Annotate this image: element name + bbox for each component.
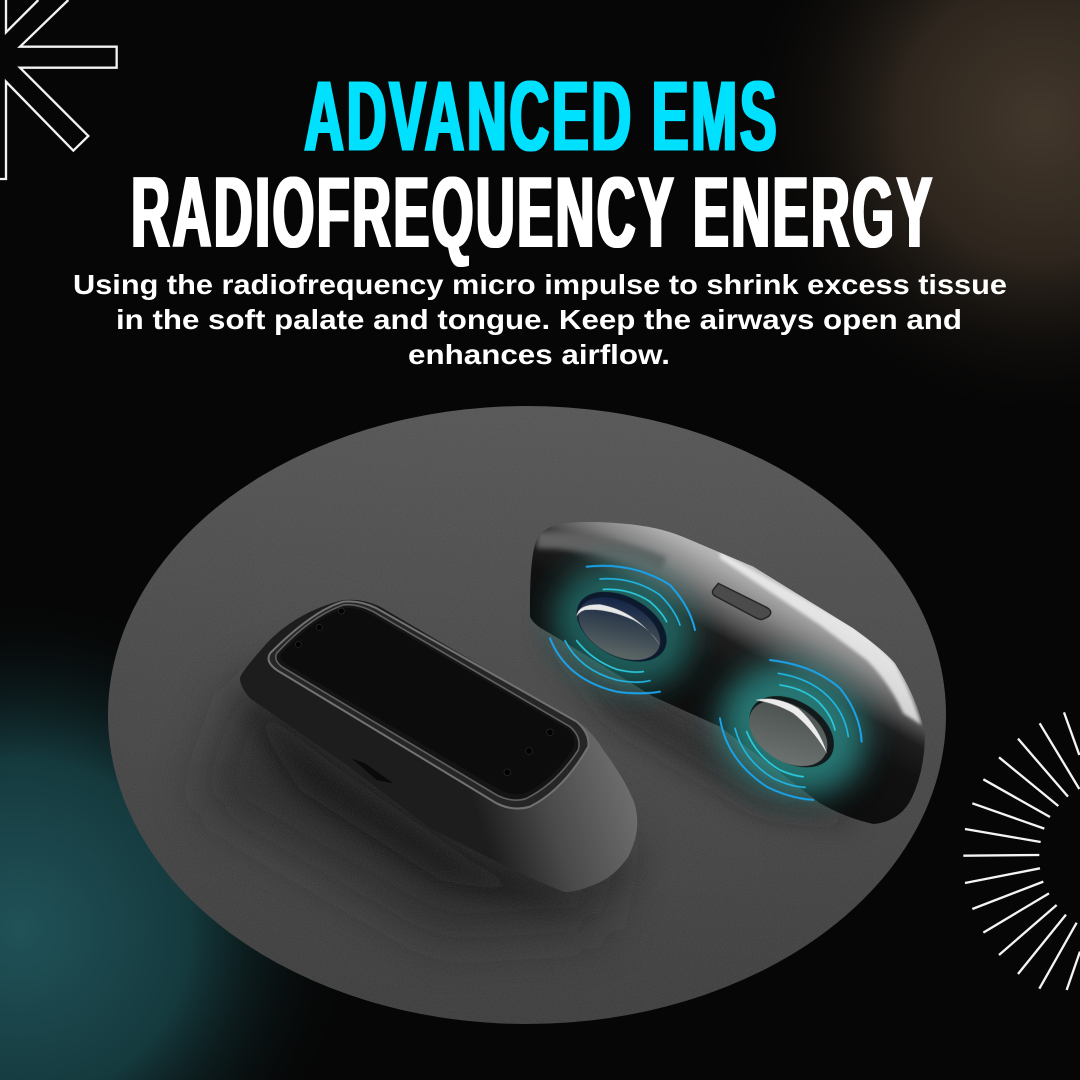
- teal glow: [534, 544, 888, 819]
- bright top rim: [720, 552, 922, 725]
- electrode right: [736, 681, 847, 782]
- signal arcs left: [550, 566, 695, 693]
- device top panel: [281, 608, 574, 794]
- upper left highlight: [537, 540, 663, 565]
- charging port: [352, 758, 393, 783]
- device: closed mouthpiece left: [240, 600, 637, 892]
- sensor dots: [295, 608, 553, 776]
- icon: sunburst lines right: [963, 712, 1080, 990]
- device shadows: [109, 442, 945, 1022]
- description text: in the soft palate and tongue. Keep the airways open and: [116, 304, 962, 335]
- device top outer ring: [268, 601, 588, 809]
- description text: Using the radiofrequency micro impulse to shrink excess tissue: [73, 269, 1007, 300]
- electrode left: [565, 577, 678, 676]
- description text: enhances airflow.: [408, 339, 670, 370]
- icon: outlined asterisk top left: [0, 0, 117, 179]
- device: open mouthpiece right with electrodes: [530, 522, 925, 824]
- description text: [73, 269, 1007, 370]
- device inner ring: [276, 605, 579, 800]
- shaded device body: [530, 522, 925, 824]
- button: [712, 583, 771, 619]
- signal arcs right: [720, 660, 862, 800]
- panel: grey circular platform: [108, 406, 946, 1024]
- device body: [240, 600, 637, 892]
